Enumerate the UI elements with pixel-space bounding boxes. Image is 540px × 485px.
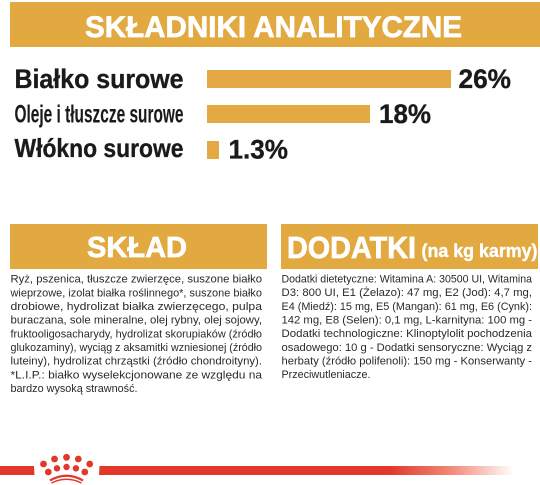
composition text: Ryż, pszenica, tłuszcze zwierzęce, suszone białko	[10, 274, 262, 286]
additives text: Dodatki dietetyczne: Witamina A: 30500 UI, Witamina	[282, 274, 532, 286]
row: crude oils and fats: 18%	[379, 99, 431, 129]
composition text: fruktooligosacharydy, hydrolizat skorupiaków (źródło	[10, 328, 262, 340]
row: crude fibre	[14, 133, 288, 164]
title banner	[10, 2, 540, 47]
composition text: drobiowe, hydrolizat białka zwierzęcego, pulpa	[10, 301, 262, 313]
row: crude protein: 26%	[458, 64, 511, 94]
additives heading: (na kg karmy)	[422, 241, 538, 261]
composition text: glukozaminy), wyciąg z aksamitki wzniesionej (źródło	[10, 342, 262, 354]
row: crude oils and fats: Oleje i tłuszcze surowe	[14, 100, 184, 128]
row: crude protein: Białko surowe	[14, 64, 184, 94]
composition text: buraczana, sole mineralne, olej rybny, olej sojowy,	[10, 315, 262, 327]
icon: royal crown logo	[40, 454, 93, 483]
additives text: E4 (Miedź): 15 mg, E5 (Mangan): 61 mg, E6 (Cynk):	[282, 301, 532, 313]
composition text: luteiny), hydrolizat chrząstki (źródło chondroityny).	[10, 356, 262, 368]
composition text: *L.I.P.: białko wyselekcjonowane ze względu na	[10, 369, 262, 381]
row: crude fibre: 1.3%	[228, 134, 288, 164]
composition text	[9, 274, 262, 395]
additives text: Dodatki technologiczne: Klinoptylolit pochodzenia	[282, 328, 532, 340]
bar chart: analytical constituents	[14, 64, 511, 164]
row: crude protein	[14, 64, 511, 94]
row: crude oils and fats	[14, 99, 431, 129]
composition text: wieprzowe, izolat białka roślinnego*, suszone białko	[9, 287, 262, 299]
additives text: herbaty (źródło polifenoli): 150 mg - Konserwanty -	[282, 356, 532, 368]
composition heading	[10, 224, 267, 269]
additives text: D3: 800 UI, E1 (Żelazo): 47 mg, E2 (Jod): 4,7 mg,	[282, 286, 532, 299]
additives heading	[281, 224, 538, 269]
composition text: bardzo wysoką strawność.	[10, 383, 138, 395]
title: SKŁADNIKI ANALITYCZNE	[85, 11, 462, 44]
footer red line	[0, 466, 514, 475]
additives text: Przeciwutleniacze.	[282, 369, 370, 381]
additives text	[282, 274, 532, 381]
additives text: 142 mg, E8 (Selen): 0,1 mg, L-karnityna: 100 mg -	[282, 314, 532, 326]
row: crude fibre: Włókno surowe	[14, 133, 184, 163]
additives heading: DODATKI	[287, 230, 416, 265]
composition heading: SKŁAD	[87, 232, 187, 264]
additives text: osadowego: 10 g - Dodatki sensoryczne: Wyciąg z	[282, 342, 532, 354]
